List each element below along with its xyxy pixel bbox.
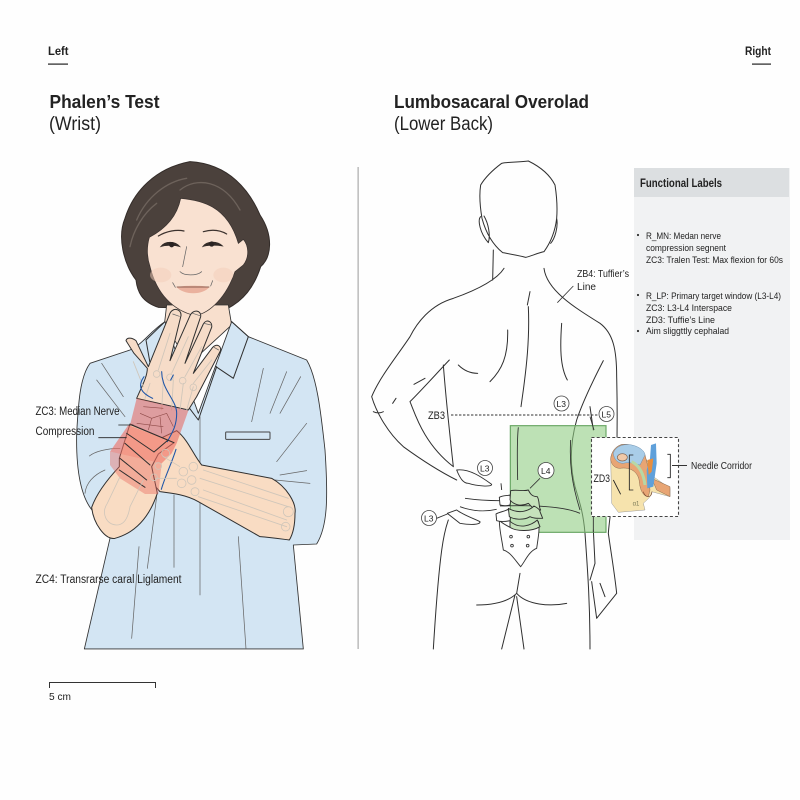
panel: functional labels: ZC3: L3-L4 Interspace: [646, 303, 732, 314]
inset: needle corridor cross-section: [592, 438, 678, 516]
panel: functional labels: R_LP: Primary target window (L3-L4): [646, 291, 781, 302]
gripping fingers: [119, 425, 174, 487]
label: needle corridor: [672, 460, 752, 472]
collar: [146, 322, 248, 420]
hair highlights: [130, 178, 240, 247]
label: L3 hand: [478, 460, 492, 476]
back contour lines: [373, 292, 593, 430]
title: Phalen's Test: Phalen’s Test: [50, 92, 160, 112]
carpal tunnel lines: [137, 407, 173, 433]
header: Right: Right: [745, 46, 771, 58]
label: ZB4: Line: [577, 281, 596, 293]
panel: functional labels: Functional Labels: [640, 178, 722, 190]
tissue layers: ɑ1: [633, 502, 640, 508]
shirt folds: [85, 363, 310, 649]
leaders: [530, 286, 573, 488]
lines over window: [500, 417, 594, 532]
title: Lumbosacral Overload: (Lower Back): [394, 114, 493, 135]
hand: [437, 470, 502, 524]
label: ZB4: [577, 268, 629, 293]
face: [147, 198, 248, 316]
label: L3 hand: L3: [480, 464, 490, 474]
left forearm and gripping hand: [92, 424, 174, 538]
shirt: [77, 322, 327, 649]
title: Lumbosacral Overload: [394, 92, 589, 135]
raised hand: [126, 309, 221, 410]
label: L3 upper: L3: [556, 399, 566, 409]
label: ZB3 with dashed level line: ZB3: [428, 410, 445, 422]
ZC3 leader lines: [98, 425, 133, 438]
panel: functional labels: [634, 168, 790, 540]
panel: functional labels: ZD3: Tuffie’s Line: [646, 315, 715, 326]
pocket: [226, 432, 270, 439]
label: L4: [538, 462, 554, 478]
sacrum: [499, 521, 539, 567]
label: L3 upper: [554, 396, 569, 411]
eyebrows: [158, 230, 227, 236]
panel: functional labels: R_MN: Medan nerve: [646, 231, 721, 242]
title: Phalen's Test: (Wrist): [49, 114, 101, 135]
label: compression: Compression: [36, 426, 94, 438]
hair: [122, 162, 270, 309]
label: L5: L5: [602, 410, 611, 420]
body outlines: [372, 161, 617, 649]
neck: [164, 305, 232, 363]
label: L3 lower: [422, 510, 436, 526]
forearm bones: [198, 470, 288, 527]
header: Left: Left: [48, 46, 69, 58]
finger nails: [173, 313, 219, 350]
median nerve: [141, 372, 177, 489]
label: L4: L4: [541, 466, 551, 476]
title: Phalen's Test: [49, 92, 160, 135]
panel: functional labels: compression segnent: [646, 243, 726, 254]
green target window: [510, 426, 606, 532]
label: ZD3: ZD3: [594, 473, 610, 485]
right forearm and hand: [147, 431, 295, 540]
red wrist highlight: [130, 398, 188, 443]
scale bar: [49, 682, 156, 703]
label: L3 lower: L3: [424, 514, 434, 524]
label: needle corridor: Needle Corridor: [691, 460, 752, 472]
illustration: woman performing Phalen's test: [77, 162, 327, 649]
label: L5: [599, 406, 614, 422]
vertebrae: [496, 490, 543, 531]
nose and mouth: [173, 247, 213, 287]
cheek blush: [150, 268, 171, 282]
header: Left: [48, 46, 69, 65]
title: Lumbosacral Overload: Lumbosacaral Overolad: [394, 92, 589, 112]
scale bar: 5 cm: [49, 691, 71, 703]
label: ZC3: ZC3: Median Nerve: [36, 406, 120, 418]
label: ZC4: ZC4: Transrarse caral Liglament: [36, 574, 182, 586]
illustration: man's back: [372, 161, 617, 649]
centre divider: [358, 167, 359, 649]
eyes: [161, 242, 223, 247]
panel: functional labels: ZC3: Tralen Test: Max flexion for 60s: [646, 255, 783, 266]
label: ZB4: ZB4: Tuffier’s: [577, 268, 629, 280]
hand bones: [133, 333, 212, 410]
panel: functional labels: Aim sliggttly cephalad: [646, 326, 729, 337]
header: Right: [745, 46, 771, 65]
